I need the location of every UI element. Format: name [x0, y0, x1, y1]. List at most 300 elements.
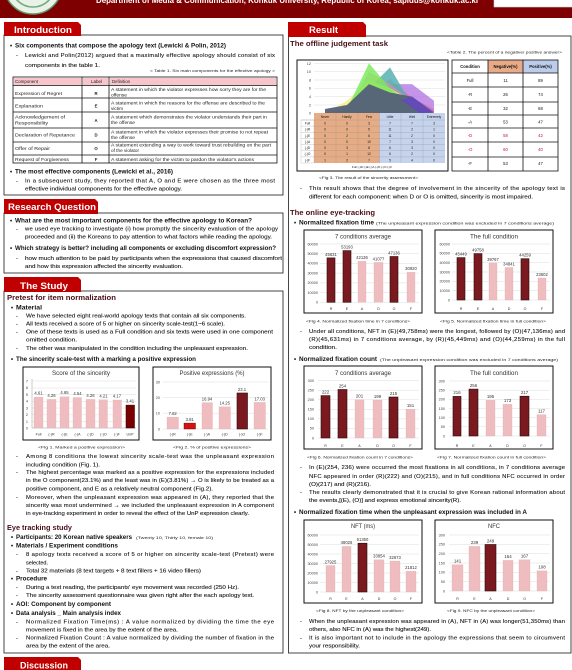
text: offline result: This result shows that the degree of involvement in the sincerity of the apology text is: [309, 186, 565, 192]
chart: fig 6 NFC 7 conditions: 222: [322, 390, 330, 394]
chart: fig 6 NFC 7 conditions: 250: [308, 388, 314, 392]
text: pretest findings: [16, 454, 275, 517]
chart: positive expressions: (-)O: [239, 432, 245, 436]
text: eye tracking method: Data analysis _ Main analysis index: [16, 611, 122, 617]
text: pretest findings: Among 8 conditions the lowest sincerity scale-test was the unpleasant expression: [26, 454, 274, 460]
heading: NFT when unpleasant expression in A: •: [294, 510, 296, 516]
text: six components: •: [10, 44, 12, 50]
chart: fig 4 NFT 7 conditions: 30920: [405, 266, 417, 271]
chart: sincerity assessment area chart: 0: [346, 122, 348, 126]
chart: sincerity assessment area chart: 0: [324, 134, 326, 138]
chart: fig 7 NFC full condition: 0: [443, 434, 445, 438]
chart: sincerity assessment area chart: 1: [346, 152, 348, 156]
chart: fig 7 NFC full condition: 216: [453, 390, 461, 395]
chart: sincerity assessment area chart: 5: [368, 128, 370, 132]
chart: fig 8 NFT by unpleasant condition: 10000: [307, 581, 318, 585]
chart: fig 4 NFT 7 conditions: 40000: [307, 262, 318, 266]
chart: fig 6 NFC 7 conditions: A: [358, 444, 361, 448]
chart: fig 8 NFT by unpleasant condition: 0: [316, 590, 318, 594]
chart: fig 9 NFC by unpleasant condition: 141: [454, 558, 462, 564]
chart: score of the sincerity: 4.54: [73, 391, 82, 396]
chart: score of the sincerity: (-)R: [48, 432, 55, 436]
chart: sincerity assessment area chart: 11: [388, 128, 392, 132]
chart: fig 7 NFC full condition: F: [540, 444, 543, 448]
text: most effective components: -: [16, 178, 18, 184]
heading: Research Question: Research Question: [8, 202, 96, 213]
chart: score of the sincerity: (-)A: [74, 432, 81, 436]
table: six components: A statement in which the violator expresses how sorry they are for the: [111, 87, 267, 92]
chart: fig 4 NFT 7 conditions: 0: [316, 301, 318, 305]
text: unpleasant findings: -: [300, 636, 302, 642]
subheading: offline judgement task: The offline judgement task: [290, 39, 389, 48]
chart: fig 9 NFC by unpleasant condition: 0: [443, 589, 445, 593]
caption: figure 5: <Fig 5. Normalized fixation time in full condition>: [440, 320, 546, 324]
text: eye tracking method: Normalized Fixation Time(ms) : A value normalized by dividing the time the eye: [26, 620, 275, 626]
chart: fig 6 NFC 7 conditions: 150: [308, 408, 314, 412]
text: pretest findings: in the O component(23.1%) and the least was in (E)(3.81%) → O is likely to be treated as a: [26, 478, 275, 484]
chart: fig 9 NFC by unpleasant condition: 100: [439, 571, 445, 575]
chart: fig 8 NFT by unpleasant condition: 27925: [325, 559, 337, 564]
chart: fig 7 NFC full condition: 150: [439, 407, 445, 411]
heading: NFT when unpleasant expression in A: Normalized fixation time when the unpleasant expression was included in A: [299, 510, 528, 516]
chart: fig 9 NFC by unpleasant condition: F: [541, 597, 544, 601]
chart: score of the sincerity: 3: [26, 406, 28, 410]
text: research questions: -: [16, 226, 18, 232]
chart: positive expressions: Positive expressions (%): [180, 371, 244, 377]
text: most effective components: effective individual components for the effective apology.: [25, 186, 182, 192]
table: negative and positive answers: 58: [503, 133, 508, 138]
text: unpleasant findings: When the unpleasant expression was appeared in (A), NFT in (A) was longer(51,350ms) than: [309, 619, 565, 625]
heading: normalized fixation time: Normalized fixation time: [299, 220, 375, 226]
chart: fig 5 NFT full condition: 0: [448, 298, 450, 302]
chart: score of the sincerity: 3.41: [126, 399, 135, 404]
text: material: •: [11, 357, 13, 363]
chart: fig 4 NFT 7 conditions: 20000: [307, 281, 318, 285]
text: eye tracking method: -: [16, 636, 18, 642]
chart: fig 4 NFT 7 conditions: E: [346, 307, 349, 311]
chart: positive expressions: (-)D: [222, 432, 228, 436]
chart: fig 4 NFT 7 conditions: 41077: [373, 256, 385, 261]
chart: sincerity assessment area chart: Hardly: [342, 115, 352, 119]
text: eye tracking method: -: [16, 585, 18, 591]
chart: fig 7 NFC full condition: 217: [521, 390, 529, 395]
chart: sincerity assessment area chart: 6: [389, 146, 391, 150]
chart: fig 6 NFC 7 conditions: 50: [310, 427, 314, 431]
chart: fig 6 NFC 7 conditions: E: [341, 444, 344, 448]
chart: fig 5 NFT full condition: D: [508, 307, 511, 311]
text: pretest findings: -: [16, 454, 18, 460]
chart: sincerity assessment area chart: 3: [411, 140, 413, 144]
text: eye tracking method: Materials / Experiment conditions: [16, 543, 119, 549]
chart: sincerity assessment area chart: (-)E: [305, 134, 310, 138]
chart: fig 9 NFC by unpleasant condition: 150: [439, 561, 445, 565]
chart: positive expressions: 14.25: [219, 401, 231, 406]
chart: sincerity assessment area chart: [297, 60, 448, 171]
chart: sincerity assessment area chart: 3: [346, 146, 348, 150]
heading: normalized fixation time: [294, 220, 554, 226]
text: research questions: how much attention to be paid by participants when the expressions that caused discomfort: [25, 256, 282, 262]
chart: sincerity assessment area chart: 5: [389, 158, 391, 162]
table: six components: Acknowledgement of: [15, 114, 66, 120]
chart: fig 8 NFT by unpleasant condition: 50000: [307, 543, 318, 547]
chart: fig 4 NFT 7 conditions: 45631: [325, 252, 337, 257]
chart: fig 6 NFC 7 conditions: 215: [390, 391, 398, 396]
text: eye tracking method: Participants: 20 Korean native speakers: [16, 535, 133, 541]
text: eye tracking method: -: [16, 593, 18, 599]
chart: fig 6 NFC 7 conditions: [304, 366, 422, 449]
chart: positive expressions: 17.03: [254, 396, 266, 401]
text: eye tracking method: •: [11, 602, 13, 608]
chart: sincerity assessment area chart: Never: [321, 115, 330, 119]
chart: fig 4 NFT 7 conditions: 53193: [341, 244, 353, 250]
chart: fig 5 NFT full condition: R: [460, 307, 463, 311]
text: unpleasant findings: others, also NFC in (A) was the highest(249).: [309, 627, 431, 633]
chart: positive expressions: 7.62: [169, 411, 177, 416]
chart: sincerity assessment area chart: 0: [433, 146, 435, 150]
chart: fig 9 NFC by unpleasant condition: 167: [521, 554, 529, 559]
chart: positive expressions: (-)R: [170, 432, 176, 436]
text: NFC findings: -: [300, 465, 302, 471]
chart: fig 8 NFT by unpleasant condition: 33854: [373, 554, 385, 559]
table: six components: [13, 77, 277, 163]
chart: sincerity assessment area chart: 0: [433, 134, 435, 138]
text: NFC findings: In (E)(254, 236) were occurred the most fixations in all conditions, in 7 conditions average: [309, 465, 566, 471]
table: negative and positive answers: 74: [538, 92, 543, 97]
text: NFT findings: condition.: [309, 345, 337, 351]
caption: figure 4: <Fig 4. Normalized fixation time in 7 conditions>: [306, 320, 410, 324]
chart: fig 5 NFT full condition: 60000: [439, 242, 450, 246]
table: six components: F: [95, 157, 98, 162]
table: six components: Label: [91, 79, 102, 84]
text: material: •: [11, 305, 13, 311]
text: eye tracking method: area by the extent of the area.: [26, 644, 110, 650]
heading: The Study: The Study: [20, 281, 69, 292]
chart: sincerity assessment area chart: 2: [309, 103, 311, 107]
chart: sincerity assessment area chart: 0: [433, 140, 435, 144]
text: unpleasant findings: It is also important not to include in the apology the expressions that seem to circumvent: [309, 636, 565, 642]
chart: fig 4 NFT 7 conditions: F: [410, 307, 413, 311]
table: negative and positive answers: 47: [538, 120, 543, 124]
chart: fig 7 NFC full condition: 195: [487, 394, 495, 399]
chart: sincerity assessment area chart: 11: [388, 134, 392, 138]
chart: fig 6 NFC 7 conditions: 254: [339, 383, 347, 388]
chart: fig 6 NFC 7 conditions: 300: [308, 379, 314, 383]
chart: fig 8 NFT by unpleasant condition: NFT (ms): [351, 524, 375, 530]
chart: fig 8 NFT by unpleasant condition: E: [345, 597, 348, 601]
chart: score of the sincerity: Score of the sincerity: [52, 371, 110, 377]
table: negative and positive answers: -O: [468, 147, 473, 152]
text: NFC findings: the events,[(E), (O)] and express emotional sincerity(R).: [309, 498, 461, 504]
chart: sincerity assessment area chart: 6: [309, 87, 311, 91]
text: research questions: proceeded and (ii) the Koreans to pay attention to what factors while reading the apology.: [25, 234, 272, 240]
table: six components: A statement which demonstrates the violator understands their part in: [111, 114, 268, 120]
chart: sincerity assessment area chart: 0: [324, 122, 326, 126]
caption: table 2: <Table 2. The percent of a negative/ positive answer>: [447, 50, 562, 54]
chart: fig 4 NFT 7 conditions: 7 conditions average: [335, 234, 392, 240]
chart: positive expressions: 0: [158, 427, 160, 431]
chart: score of the sincerity: 5: [26, 393, 28, 397]
chart: sincerity assessment area chart: 10: [307, 70, 311, 74]
chart: sincerity assessment area chart: (-)R: [305, 128, 311, 132]
chart: score of the sincerity: 4.17: [113, 394, 122, 398]
chart: fig 6 NFC 7 conditions: 200: [308, 398, 314, 402]
text: pretest findings: including condition (Fig. 1).: [26, 462, 100, 468]
text: six components: Lewicki and Polin(2012) argued that a maximally effective apology should consist of six: [25, 53, 275, 59]
chart: fig 5 NFT full condition: A: [492, 307, 495, 311]
chart: fig 8 NFT by unpleasant condition: 51350: [357, 537, 369, 542]
table: negative and positive answers: -D: [468, 133, 472, 138]
table: negative and positive answers: 89: [538, 78, 543, 83]
table caption: < Table 1. Six main components for the effective apology >: [150, 69, 275, 73]
chart: fig 5 NFT full condition: 45449: [455, 252, 467, 256]
chart: sincerity assessment area chart: 4: [309, 95, 311, 99]
chart: fig 8 NFT by unpleasant condition: 60000: [307, 533, 318, 537]
chart: positive expressions: 23.1: [238, 387, 247, 392]
chart: fig 6 NFC 7 conditions: 100: [308, 417, 314, 421]
chart: sincerity assessment area chart: Full: [305, 122, 310, 126]
caption: figure 7: <Fig 7. Normalized fixation count in full condition>: [437, 456, 546, 460]
chart: fig 6 NFC 7 conditions: F: [409, 444, 412, 448]
chart: sincerity assessment area chart: 2: [411, 152, 413, 156]
chart: score of the sincerity: 4.61: [34, 390, 43, 396]
chart: sincerity assessment area chart: 7: [411, 122, 413, 126]
heading: The Study: [4, 277, 81, 292]
chart: fig 5 NFT full condition: O: [524, 307, 527, 311]
chart: fig 9 NFC by unpleasant condition: 250: [439, 543, 445, 547]
icon: university seal: [4, 0, 62, 14]
text: most effective components: The most effective components (Lewicki et al., 2016): [15, 170, 173, 176]
text: NFT findings: (R)(45,631ms) in 7 conditions average, by (R)(45,449ms) and (O)(44,259ms) in the full: [309, 337, 565, 343]
text: most effective components: In a subsequent study, they reported that A, O and E were chosen as the three most: [25, 178, 275, 184]
header white box: [494, 0, 572, 7]
chart: fig 8 NFT by unpleasant condition: R: [329, 597, 332, 601]
chart: sincerity assessment area chart: 0: [346, 128, 348, 132]
chart: positive expressions: (-)A: [204, 432, 211, 436]
table: negative and positive answers: 68: [538, 106, 543, 111]
chart: sincerity assessment area chart: (-)D: [305, 146, 311, 150]
chart: fig 4 NFT 7 conditions: 42136: [356, 255, 368, 260]
chart: score of the sincerity: 4.26: [86, 393, 95, 398]
chart: fig 7 NFC full condition: 300: [439, 379, 445, 383]
text: NFC findings: -: [300, 490, 302, 496]
chart: score of the sincerity: (-)O: [100, 432, 107, 436]
text: pretest findings: -: [16, 495, 18, 501]
chart: fig 9 NFC by unpleasant condition: A: [489, 597, 492, 601]
chart: fig 7 NFC full condition: 256: [470, 383, 478, 388]
chart: fig 5 NFT full condition: E: [477, 307, 480, 311]
chart: fig 5 NFT full condition: 49758: [472, 248, 484, 252]
text: material: One of these texts is used as a Full condition and six texts were used in one component: [26, 330, 273, 336]
chart: sincerity assessment area chart: 7: [389, 140, 391, 144]
text: research questions: •: [10, 246, 12, 252]
text: NFC findings: The results clearly demonstrated that it is crucial to give Korean rational information about: [309, 490, 565, 496]
heading: normalized fixation count: [294, 357, 558, 363]
chart: score of the sincerity: 4.26: [47, 393, 56, 398]
chart: fig 8 NFT by unpleasant condition: 40000: [307, 552, 318, 556]
chart: fig 6 NFC 7 conditions: 199: [374, 394, 382, 399]
chart: fig 7 NFC full condition: 250: [439, 388, 445, 392]
table: negative and positive answers: 60: [503, 147, 508, 152]
text: eye tracking method: Total 32 materials (8 text targets + 8 text fillers + 16 video fillers): [26, 569, 201, 575]
table: negative and positive answers: [452, 60, 558, 171]
chart: sincerity assessment area chart: 8: [309, 78, 311, 82]
chart: positive expressions: 10: [156, 412, 160, 416]
caption: figure 3: <Fig 3. The result of the sincerity assessment>: [319, 176, 418, 180]
chart: score of the sincerity: 2: [26, 413, 28, 417]
text: material: -: [16, 313, 18, 319]
text: pretest findings: positive component, and E as a relatively neutral component (Fig.2).: [26, 486, 213, 492]
chart: sincerity assessment area chart: Little: [387, 115, 394, 119]
text: eye tracking method: Procedure: [16, 576, 48, 582]
table: six components: E: [95, 104, 98, 108]
chart: fig 5 NFT full condition: 34841: [503, 261, 515, 266]
text: pretest findings: -: [16, 470, 18, 476]
text: research questions: Which strategy is better? including all components or excluding discomfort expression?: [15, 246, 276, 252]
chart: sincerity assessment area chart: 0: [324, 140, 326, 144]
chart: fig 9 NFC by unpleasant condition: 164: [504, 554, 512, 559]
caption: figure 1: <Fig 1. Marked a positive expression>: [38, 446, 125, 450]
text: material: omitted condition.: [26, 338, 77, 344]
table: six components: D: [94, 132, 98, 138]
text: pretest findings: The highest percentage was marked as a positive expression for the expressions included: [26, 470, 274, 476]
table: six components: the offense: [111, 120, 136, 125]
subheading: pretest: Pretest for item normalization: [7, 293, 116, 302]
text: material: -: [16, 346, 18, 352]
table: six components: victim: [111, 106, 123, 111]
chart: fig 8 NFT by unpleasant condition: 32673: [389, 555, 401, 560]
chart: fig 4 NFT 7 conditions: 50000: [307, 252, 318, 256]
chart: fig 4 NFT 7 conditions: 10000: [307, 291, 318, 295]
chart: score of the sincerity: 1: [26, 420, 28, 424]
chart: fig 5 NFT full condition: 40000: [439, 261, 450, 265]
chart: score of the sincerity: (-)D: [87, 432, 94, 436]
chart: fig 9 NFC by unpleasant condition: 50: [441, 580, 445, 584]
chart: fig 9 NFC by unpleasant condition: R: [456, 597, 459, 601]
text: eye tracking method: •: [11, 611, 13, 617]
table: six components: A statement asking for the victim to pardon the violator's actions: [111, 157, 254, 162]
table: six components: Responsibility: [15, 120, 49, 126]
caption: figure 8: <Fig 8. NFT by the unpleasant condition>: [316, 609, 404, 613]
text: offline result: [300, 186, 565, 200]
chart: fig 5 NFT full condition: The full condition: [470, 234, 518, 240]
chart: positive expressions: 30: [156, 380, 160, 384]
chart: positive expressions: (-)E: [187, 432, 193, 436]
table: negative and positive answers: -E: [468, 106, 472, 111]
table: negative and positive answers: 32: [503, 106, 508, 111]
chart: sincerity assessment area chart: 7: [389, 122, 391, 126]
chart: fig 5 NFT full condition: 20000: [439, 280, 450, 284]
text: eye tracking method: movement is fixed in the area by the extent of the area.: [26, 627, 178, 633]
text: six components: components in the table 1.: [25, 63, 100, 69]
chart: sincerity assessment area chart: 3: [433, 122, 435, 126]
chart: sincerity assessment area chart: 12: [307, 62, 311, 66]
text: eye tracking method: Normalized Fixation Count : A value normalized by dividing the number of fixation in the: [26, 636, 275, 642]
caption: figure 9: <Fig 9. NFC by the unpleasant condition>: [447, 609, 535, 613]
heading: Discussion: [4, 657, 81, 670]
panel: the study: [4, 277, 283, 653]
text: unpleasant findings: your responsibility.: [309, 644, 360, 650]
chart: fig 7 NFC full condition: 200: [439, 398, 445, 402]
text: material: The sincerity scale-test with a marking a positive expression: [16, 357, 196, 363]
chart: fig 7 NFC full condition: O: [523, 444, 526, 448]
chart: fig 5 NFT full condition: 10000: [439, 289, 450, 293]
chart: score of the sincerity: UnP: [126, 432, 134, 436]
chart: fig 7 NFC full condition: A: [489, 444, 492, 448]
table: negative and positive answers: Negative(%): [494, 64, 518, 69]
chart: sincerity assessment area chart: Well: [409, 115, 415, 119]
chart: score of the sincerity: 4.21: [99, 393, 108, 398]
table: six components: Offer of Repair: [15, 146, 51, 151]
chart: score of the sincerity: [23, 367, 139, 440]
chart: positive expressions: [153, 367, 271, 440]
table: six components: O: [94, 146, 98, 151]
table: negative and positive answers: 11: [503, 78, 508, 83]
chart: fig 6 NFC 7 conditions: 151: [407, 403, 415, 408]
chart: fig 4 NFT 7 conditions: D: [377, 307, 380, 311]
text: eye tracking method: selected.: [26, 560, 48, 566]
text: eye tracking method: -: [16, 569, 18, 575]
text: pretest findings: in eye-tracking experiment in order to reveal the effect of the UnP expression clearly.: [26, 511, 249, 517]
chart: fig 6 NFC 7 conditions: 7 conditions average: [335, 371, 392, 377]
chart: fig 9 NFC by unpleasant condition: 249: [487, 538, 495, 543]
table: six components: of the violator: [111, 148, 140, 153]
text: research questions: What are the most important components for the effective apology to Korean?: [15, 218, 252, 224]
text: six components: -: [16, 53, 18, 59]
chart: fig 7 NFC full condition: 117: [538, 408, 546, 413]
text: eye tracking method: 8 apology texts received a score of 5 or higher on sincerity scale-test (Pretest) were: [26, 552, 275, 558]
table: six components: the offense: [111, 135, 136, 140]
chart: fig 4 NFT 7 conditions: 47136: [388, 250, 400, 255]
table: six components: Definition: [112, 79, 131, 84]
chart: fig 9 NFC by unpleasant condition: O: [523, 597, 526, 601]
chart: fig 9 NFC by unpleasant condition: 200: [439, 552, 445, 556]
chart: fig 7 NFC full condition: 50: [441, 425, 445, 429]
chart: sincerity assessment area chart: 2: [346, 158, 348, 162]
table: negative and positive answers: -F: [468, 161, 472, 166]
chart: score of the sincerity: Full: [36, 432, 42, 436]
chart: sincerity assessment area chart: 3: [411, 146, 413, 150]
chart: sincerity assessment area chart: 0: [433, 152, 435, 156]
text: material: The other was manipulated in the condition including the unpleasant expression.: [26, 346, 248, 352]
chart: sincerity assessment area chart: 3: [368, 122, 370, 126]
heading: Result: [288, 22, 366, 37]
table: six components: A: [94, 118, 98, 123]
text: eye tracking method: -: [16, 552, 18, 558]
heading: normalized fixation count: (The unpleasant expression condition was excluded in 7 conditions average): [380, 358, 558, 362]
chart: score of the sincerity: 6: [26, 386, 28, 390]
chart: fig 8 NFT by unpleasant condition: 30000: [307, 562, 318, 566]
chart: fig 4 NFT 7 conditions: R: [330, 307, 333, 311]
chart: score of the sincerity: 0: [26, 426, 28, 430]
chart: fig 7 NFC full condition: The full condition: [470, 371, 518, 377]
table: negative and positive answers: Condition: [460, 64, 480, 69]
heading: Introduction: Introduction: [14, 25, 72, 36]
chart: fig 4 NFT 7 conditions: O: [393, 307, 396, 311]
heading: normalized fixation count: •: [294, 357, 296, 363]
table: six components: Request of Forgiveness: [15, 157, 69, 162]
text: six components: [10, 44, 275, 69]
text: eye tracking method: •: [11, 543, 13, 549]
text: eye tracking method: •: [11, 535, 13, 541]
chart: fig 5 NFT full condition: 30000: [439, 270, 450, 274]
chart: fig 8 NFT by unpleasant condition: [304, 520, 422, 603]
chart: sincerity assessment area chart: 1: [324, 158, 326, 162]
chart: fig 7 NFC full condition: D: [506, 444, 509, 448]
chart: sincerity assessment area chart: Few: [366, 115, 373, 119]
chart: fig 6 NFC 7 conditions: O: [392, 444, 395, 448]
chart: fig 8 NFT by unpleasant condition: 20000: [307, 571, 318, 575]
chart: positive expressions: (-)F: [257, 432, 263, 436]
